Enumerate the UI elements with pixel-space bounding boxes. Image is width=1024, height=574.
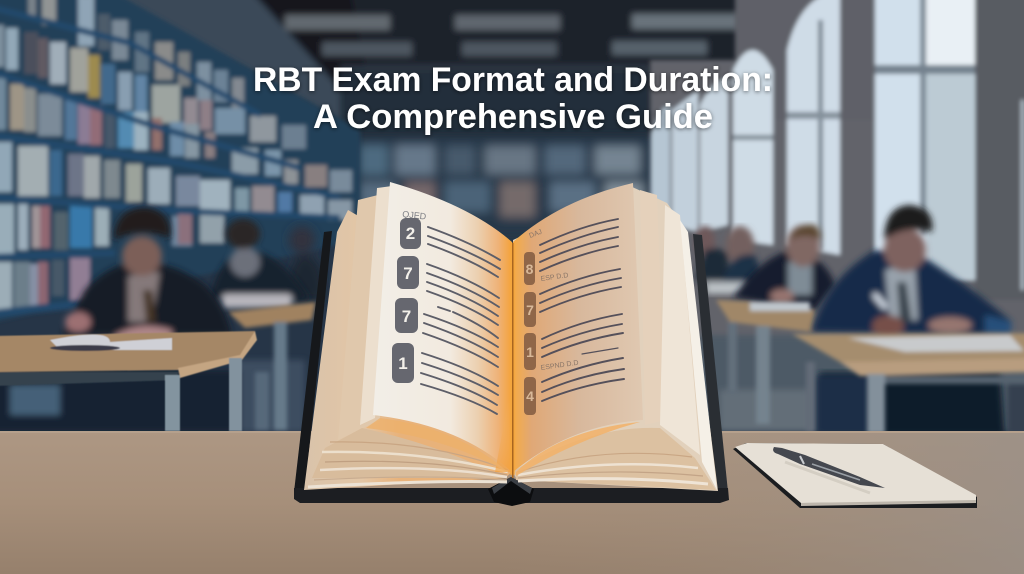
right small labels: ESPND D.D [540, 360, 579, 372]
left number badges [392, 218, 421, 383]
person: far back right students [695, 226, 765, 294]
left number badges: 7 [403, 264, 413, 283]
person: middle right student [733, 225, 835, 310]
book cover [294, 231, 729, 506]
left page label: QJED [402, 209, 427, 222]
right small labels [528, 229, 579, 372]
desk: front left [0, 331, 257, 431]
left text lines [421, 227, 500, 414]
row 5 [0, 262, 12, 310]
title line 1: RBT Exam Format and Duration: [253, 61, 773, 99]
background: floor [0, 335, 1024, 432]
row 4 [0, 204, 14, 254]
right small labels: ESP D.D [540, 272, 569, 283]
book [294, 182, 729, 506]
person: far back left [285, 226, 325, 300]
background: ceiling and beams [95, 0, 750, 140]
desk: front right [792, 333, 1024, 434]
person: second student left [210, 219, 310, 308]
row 2 [0, 78, 6, 130]
background: right wall and windows [650, 0, 1024, 380]
notebook [733, 443, 977, 508]
background: far shelves on back wall [345, 138, 655, 238]
row 3 [0, 142, 12, 192]
dark area under front right desk [815, 372, 1005, 436]
right number badges: 4 [526, 388, 534, 404]
shelf boards [0, 4, 340, 318]
foreground wooden table [0, 431, 1024, 574]
right text lines [540, 219, 624, 401]
right small labels: DAJ [528, 229, 543, 240]
pen [773, 447, 885, 493]
right number badges: 1 [526, 344, 534, 360]
right number badges [524, 252, 536, 415]
person: front left student [62, 207, 232, 342]
right number badges: 8 [526, 261, 534, 277]
title [253, 61, 773, 136]
right number badges: 7 [526, 302, 534, 318]
desk: middle right [716, 300, 815, 424]
row 0 [28, 0, 36, 18]
left top page [373, 182, 512, 472]
glowing spine [366, 243, 640, 478]
row 1 [0, 25, 4, 67]
left page stack [304, 186, 512, 490]
left number badges: 1 [398, 354, 408, 373]
person: front right student [812, 205, 1012, 337]
background: left bookshelves [0, 0, 360, 325]
right top page [513, 183, 643, 472]
right page stack [513, 186, 718, 491]
left number badges: 2 [406, 224, 415, 243]
title line 2: A Comprehensive Guide [313, 98, 713, 136]
desk: left rear [228, 302, 316, 430]
left number badges: 7 [402, 307, 411, 326]
